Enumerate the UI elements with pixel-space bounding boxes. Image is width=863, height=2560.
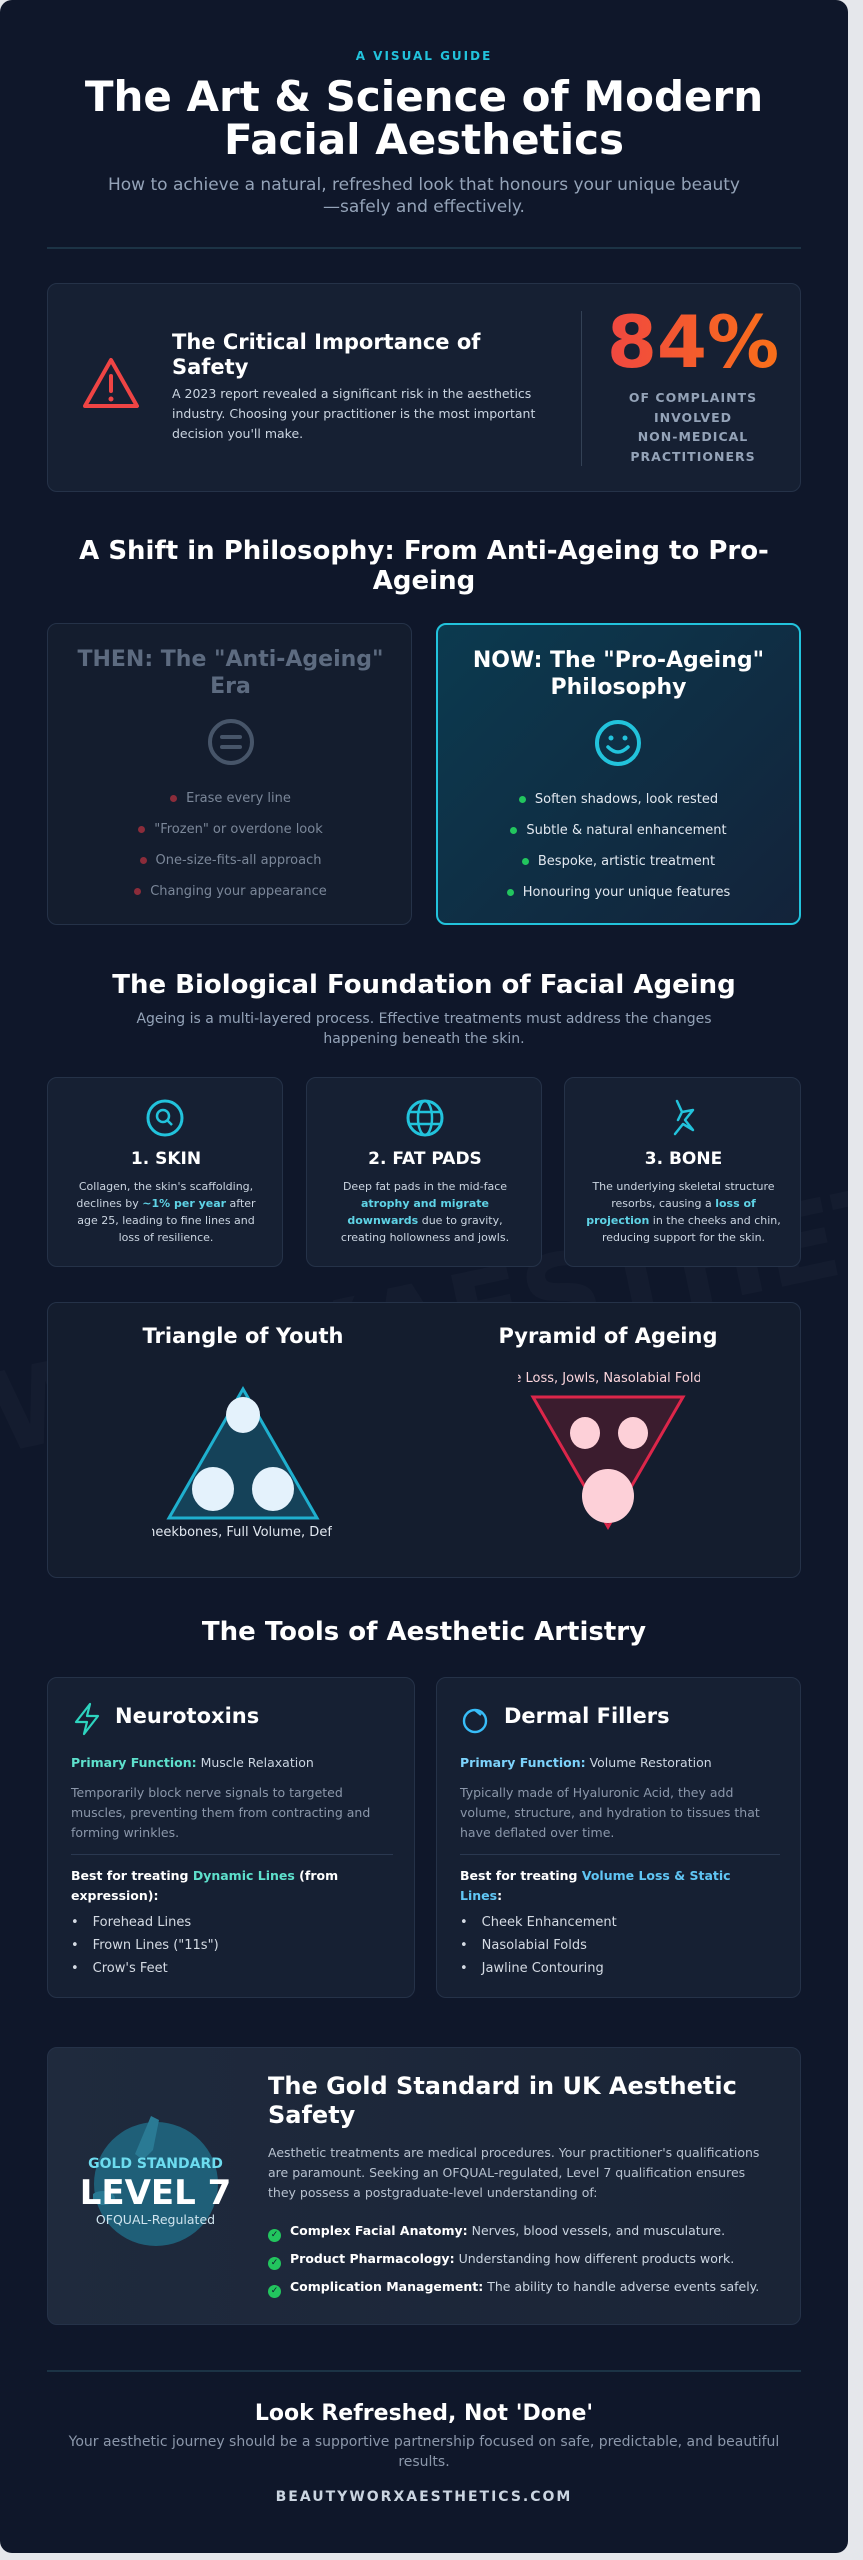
checklist: ✓ [271, 2230, 278, 2240]
checklist: Complication Management: The ability to handle adverse events safely. [290, 2279, 759, 2294]
badge: level 7: OFQUAL-Regulated [96, 2212, 215, 2227]
icon: figure [674, 1100, 694, 1136]
icon: warning [83, 358, 140, 408]
panel: bone [564, 1077, 801, 1267]
badge: level 7 [80, 2116, 231, 2246]
title: The Art & Science of Modern Facial Aesthetics [85, 72, 763, 164]
safety text [172, 330, 536, 441]
panel: neurotoxins [47, 1677, 415, 1998]
panel: bone: 3. BONE [645, 1149, 722, 1169]
stat: 84%: PRACTITIONERS [630, 448, 756, 464]
stat: 84%: 84% [607, 300, 779, 384]
checklist: Complex Facial Anatomy: Nerves, blood vessels, and musculature. [290, 2223, 725, 2238]
list: then: One-size-fits-all approach [156, 853, 321, 868]
panel: then [47, 623, 412, 925]
list: then: Changing your appearance [150, 884, 327, 899]
footer text: Your aesthetic journey should be a supportive partnership focused on safe, predictable, and beautiful results. [69, 2434, 779, 2470]
list: fillers [462, 1915, 617, 1976]
list: now: Bespoke, artistic treatment [538, 854, 715, 869]
checklist: ✓ [271, 2258, 278, 2268]
gold text [268, 2072, 759, 2298]
panel: safety [47, 283, 801, 492]
list: then: Erase every line [186, 791, 291, 806]
panel: now [436, 623, 801, 925]
panel: dermal fillers: Dermal Fillers [504, 1704, 670, 1728]
list: neurotoxins [73, 1915, 219, 1976]
list: then [134, 791, 327, 899]
heading: shift in philosophy: A Shift in Philosophy: From Anti-Ageing to Pro-Ageing [79, 536, 769, 596]
subheading: Ageing is a multi-layered process. Effective treatments must address the changes happening beneath the skin. [136, 1011, 712, 1047]
panel: skin: 1. SKIN [131, 1149, 201, 1169]
panel: fat pads: Deep fat pads in the mid-face atrophy and migrate downwards due to gravity, creating hollowness and jowls. [341, 1180, 509, 1244]
heading: tools: The Tools of Aesthetic Artistry [202, 1617, 646, 1647]
panel: neurotoxins: Temporarily block nerve signals to targeted muscles, preventing them from contracting and forming wrinkles. [71, 1785, 370, 1840]
panel: skin [47, 1077, 283, 1267]
icon: smile [595, 720, 641, 766]
checklist: Product Pharmacology: Understanding how different products work. [290, 2251, 734, 2266]
safety text: A 2023 report revealed a significant risk in the aesthetics industry. Choosing your practitioner is the most important decision you'll make. [172, 386, 535, 441]
badge: level 7: LEVEL 7 [80, 2173, 231, 2213]
icon: magnifier [146, 1100, 184, 1136]
list: then: "Frozen" or overdone look [154, 822, 323, 837]
badge: level 7: GOLD STANDARD [88, 2156, 223, 2172]
list: now: Subtle & natural enhancement [526, 823, 727, 838]
eyebrow: A VISUAL GUIDE [356, 49, 492, 63]
safety text: The Critical Importance of Safety [172, 330, 480, 379]
panel: neurotoxins: Best for treating Dynamic Lines (from expression): [71, 1868, 338, 1903]
icon: bolt [74, 1702, 100, 1736]
panel: bone: The underlying skeletal structure resorbs, causing a loss of projection in the cheeks and chin, reducing support for the skin. [586, 1180, 781, 1244]
panel: now: NOW: The "Pro-Ageing" [473, 648, 764, 673]
list: neurotoxins: Crow's Feet [93, 1961, 168, 1976]
panel: dermal fillers: Best for treating Volume Loss & Static Lines: [460, 1868, 731, 1903]
stat: 84%: NON-MEDICAL [638, 429, 748, 444]
list: now: Soften shadows, look rested [535, 792, 718, 807]
panel: fat pads: 2. FAT PADS [368, 1149, 482, 1169]
panel: skin: Collagen, the skin's scaffolding, declines by ~1% per year after age 25, leading to fine lines and loss of resilience. [76, 1180, 256, 1244]
gold text: Aesthetic treatments are medical procedures. Your practitioner's qualifications are paramount. Seeking an OFQUAL-regulated, Level 7 qualification ensures they possess a postgraduate-level understanding of: [268, 2145, 759, 2200]
panel: dermal fillers [436, 1677, 801, 1998]
subtitle: How to achieve a natural, refreshed look that honours your unique beauty —safely and effectively. [108, 175, 740, 217]
gold text: The Gold Standard in UK Aesthetic Safety [268, 2072, 737, 2129]
diagram: pyramid of ageing [530, 1396, 686, 1530]
footer url: BEAUTYWORXAESTHETICS.COM [276, 2489, 572, 2505]
heading: pyramid of ageing: Pyramid of Ageing [498, 1324, 718, 1348]
stat: 84%: INVOLVED [654, 410, 732, 424]
list: neurotoxins: Frown Lines ("11s") [93, 1938, 219, 1953]
icon: globe [406, 1100, 444, 1136]
icon: neutral face [208, 719, 254, 765]
icon: drop [462, 1708, 488, 1734]
checklist: ✓ [271, 2286, 278, 2296]
panel: gold standard [47, 2047, 801, 2325]
checklist [268, 2223, 759, 2298]
panel: triangle and pyramid [47, 1302, 801, 1578]
panel: dermal fillers: Typically made of Hyaluronic Acid, they add volume, structure, and hydration to tissues that have deflated over time. [460, 1785, 760, 1840]
list: neurotoxins: Forehead Lines [93, 1915, 191, 1930]
diagram: triangle of youth [166, 1386, 320, 1520]
panel: now: Philosophy [551, 675, 686, 700]
stat: 84%: OF COMPLAINTS [629, 390, 757, 405]
panel: then: THEN: The "Anti-Ageing" [77, 647, 384, 672]
stat: 84% [607, 300, 779, 464]
list: fillers: Jawline Contouring [482, 1961, 604, 1976]
panel: neurotoxins: Primary Function: Muscle Relaxation [71, 1755, 314, 1770]
panel: fat pads [306, 1077, 542, 1267]
panel: dermal fillers: Primary Function: Volume Restoration [460, 1755, 712, 1770]
list: now [507, 792, 730, 900]
panel: neurotoxins: Neurotoxins [115, 1704, 259, 1728]
footer heading: Look Refreshed, Not 'Done' [255, 2401, 593, 2426]
panel: then: Era [210, 674, 251, 699]
heading: biological foundation: The Biological Foundation of Facial Ageing [112, 970, 736, 1000]
heading: triangle of youth: Triangle of Youth [142, 1324, 344, 1348]
list: fillers: Cheek Enhancement [482, 1915, 617, 1930]
list: fillers: Nasolabial Folds [482, 1938, 587, 1953]
list: now: Honouring your unique features [523, 885, 730, 900]
